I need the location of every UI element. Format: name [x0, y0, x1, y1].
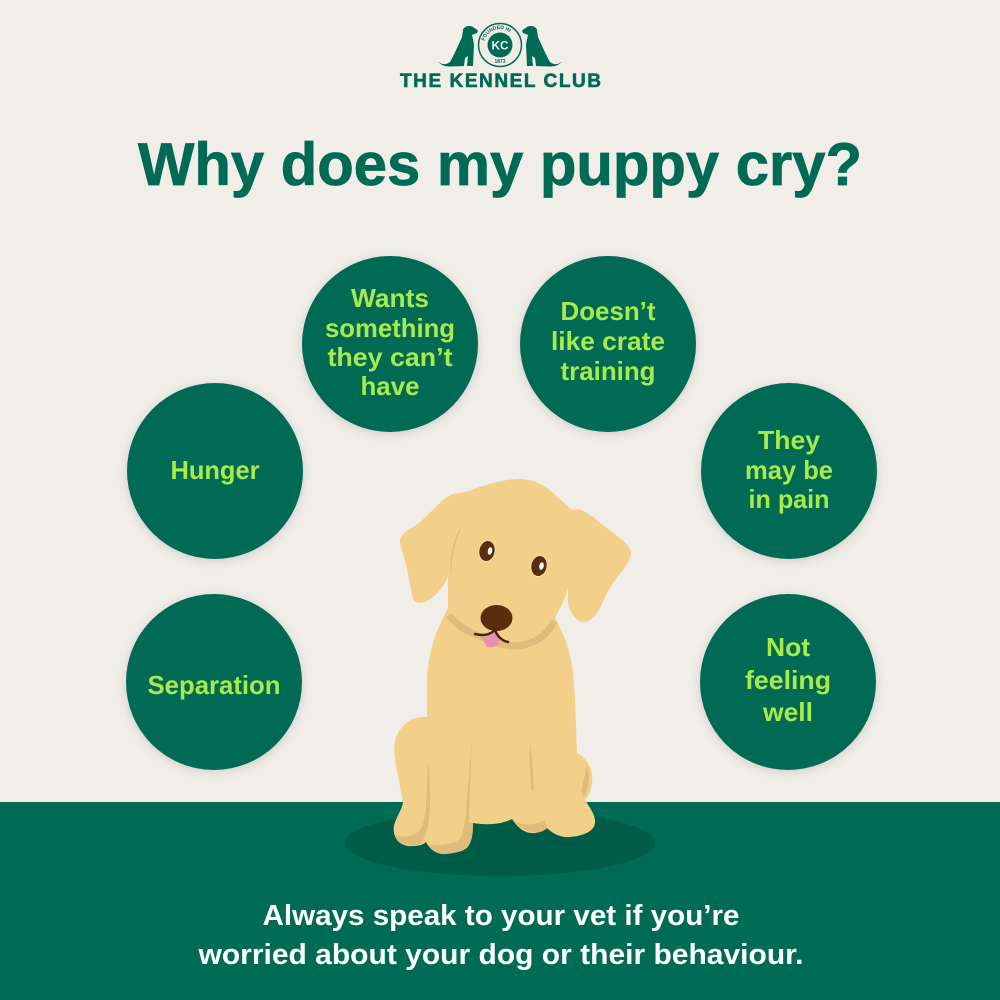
logo roundel: FOUNDED IN — [481, 26, 511, 41]
circle: not feeling well: feeling — [745, 665, 831, 695]
footer message: Always speak to your vet if you’re — [262, 900, 740, 932]
circle: pain — [701, 383, 877, 559]
footer message: worried about your dog or their behaviour. — [197, 939, 803, 971]
circle: separation: Separation — [148, 670, 280, 700]
circle: pain: in pain — [748, 484, 830, 514]
circle: separation — [126, 594, 302, 770]
puppy eyes — [477, 539, 549, 578]
puppy ear crease — [450, 526, 462, 574]
circle: hunger: Hunger — [170, 455, 260, 485]
logo: The Kennel Club — [400, 22, 601, 92]
circle: not feeling well — [700, 594, 876, 770]
puppy leg and paw shading — [395, 738, 589, 854]
puppy mouth — [475, 630, 508, 642]
puppy nose — [480, 605, 512, 631]
circle: crate training — [520, 256, 696, 432]
circle: hunger — [127, 383, 303, 559]
circle: crate training: like crate — [551, 326, 665, 356]
puppy collar — [449, 615, 554, 646]
puppy head and ears — [400, 479, 631, 644]
circle: pain: They — [758, 425, 821, 455]
circle: crate training: training — [560, 356, 656, 386]
circle: wants something — [302, 256, 478, 432]
circle: not feeling well: well — [762, 697, 813, 727]
title: Why does my puppy cry? — [138, 131, 862, 198]
ground band — [0, 802, 1000, 1000]
puppy body — [394, 608, 595, 854]
circle: not feeling well: Not — [766, 632, 810, 662]
circle: crate training: Doesn’t — [560, 296, 656, 326]
logo right dog — [522, 26, 562, 66]
logo roundel — [478, 22, 522, 68]
circle: wants something: something — [325, 313, 455, 343]
logo roundel: KC — [492, 38, 509, 52]
puppy tongue — [482, 632, 500, 647]
circle: pain: may be — [745, 455, 833, 485]
circle: wants something: have — [360, 371, 420, 401]
circle: wants something: they can’t — [328, 342, 453, 372]
footer message — [197, 900, 803, 971]
circle: wants something: Wants — [351, 283, 429, 313]
dog shadow — [345, 810, 655, 876]
logo left dog — [438, 26, 478, 66]
logo roundel: 1873 — [494, 59, 506, 65]
puppy illustration — [394, 479, 631, 854]
logo wordmark: THE KENNEL CLUB — [400, 71, 601, 92]
